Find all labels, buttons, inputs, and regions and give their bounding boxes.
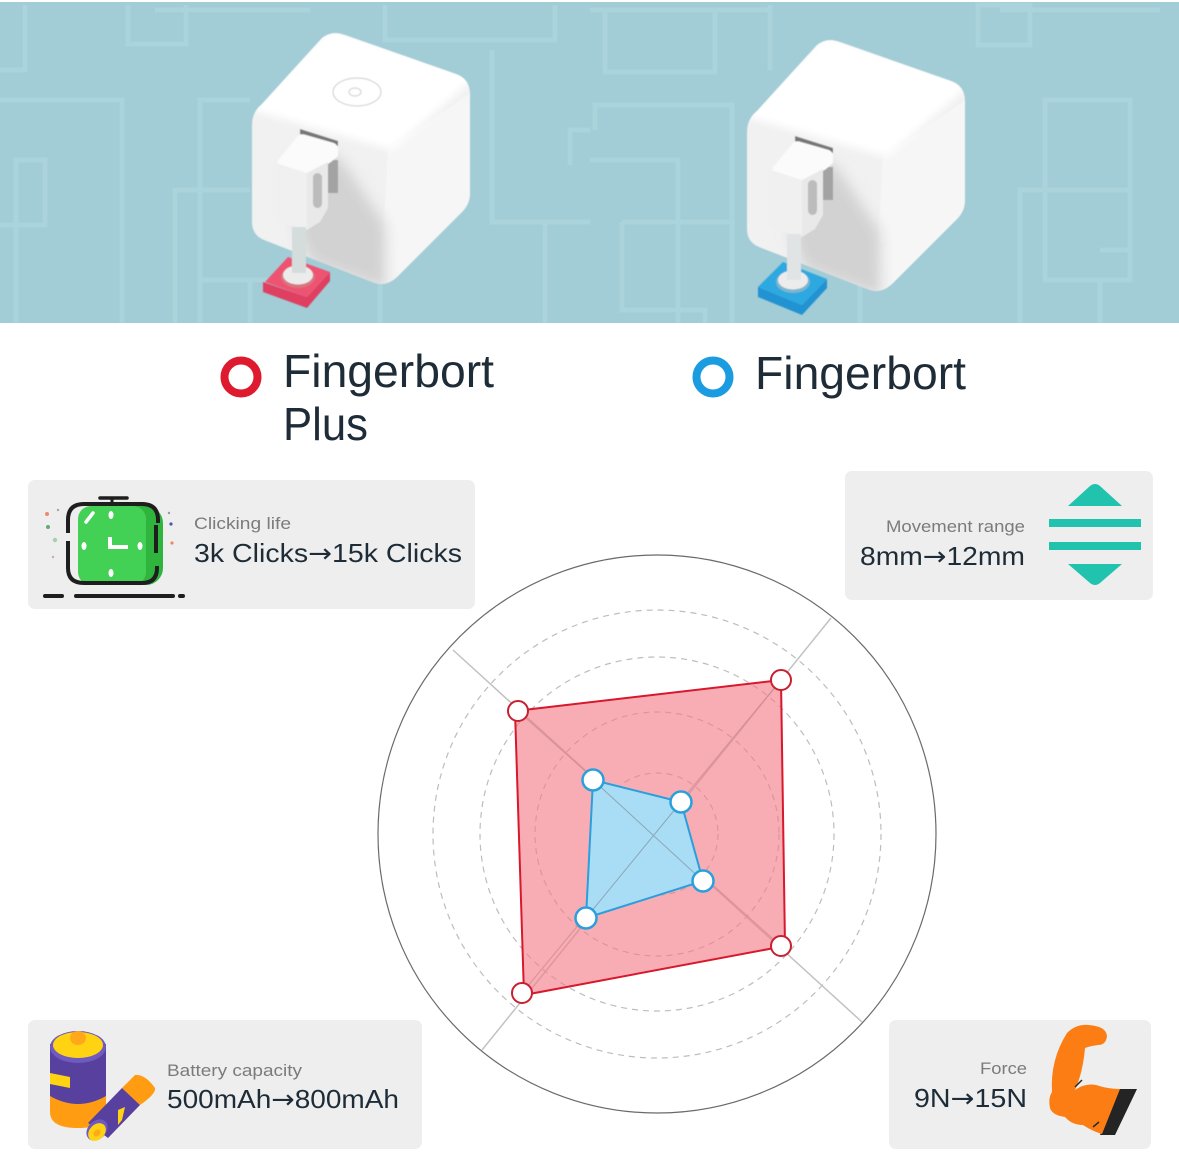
product image: Fingerbot Plus cube with red button (252, 32, 470, 309)
text: force: Force (980, 1059, 1027, 1078)
legend label: Fingerbort Plus: Plus (283, 398, 368, 450)
icon: green clock (45, 498, 183, 596)
legend: Fingerbort (696, 347, 966, 399)
text: movement range (860, 517, 1025, 572)
text: clicking life (194, 514, 462, 569)
panel: force (889, 1020, 1151, 1149)
radar chart (378, 555, 936, 1113)
legend marker: blue ring (696, 360, 730, 394)
text: movement range: 8mm→12mm (860, 541, 1025, 572)
panel: battery capacity (28, 1020, 422, 1149)
icon: flexed arm (1049, 1025, 1137, 1135)
text: force (914, 1059, 1027, 1114)
text: battery capacity: Battery capacity (167, 1061, 303, 1080)
panel: movement range (845, 471, 1153, 600)
legend label: Fingerbort Plus: Fingerbort (283, 345, 494, 397)
text: battery capacity: 500mAh →800mAh (167, 1084, 399, 1115)
legend: Fingerbort Plus (224, 345, 494, 450)
product image: Fingerbot cube with blue button (746, 40, 966, 316)
text: force: 9N→15N (914, 1083, 1027, 1114)
text: clicking life: 3k Clicks →15k Clicks (194, 538, 462, 569)
panel: clicking life (28, 480, 475, 609)
radar series: Fingerbort Plus (508, 670, 791, 1003)
text: movement range: Movement range (886, 517, 1025, 536)
radar series: Fingerbort (576, 770, 714, 928)
text: clicking life: Clicking life (194, 514, 291, 533)
text: battery capacity (167, 1061, 399, 1115)
legend marker: red ring (224, 360, 258, 394)
icon: up and down arrows (1049, 484, 1141, 585)
legend label: Fingerbort: Fingerbort (755, 347, 966, 399)
panel: teal product banner (0, 2, 1179, 340)
icon: batteries (50, 1031, 155, 1145)
